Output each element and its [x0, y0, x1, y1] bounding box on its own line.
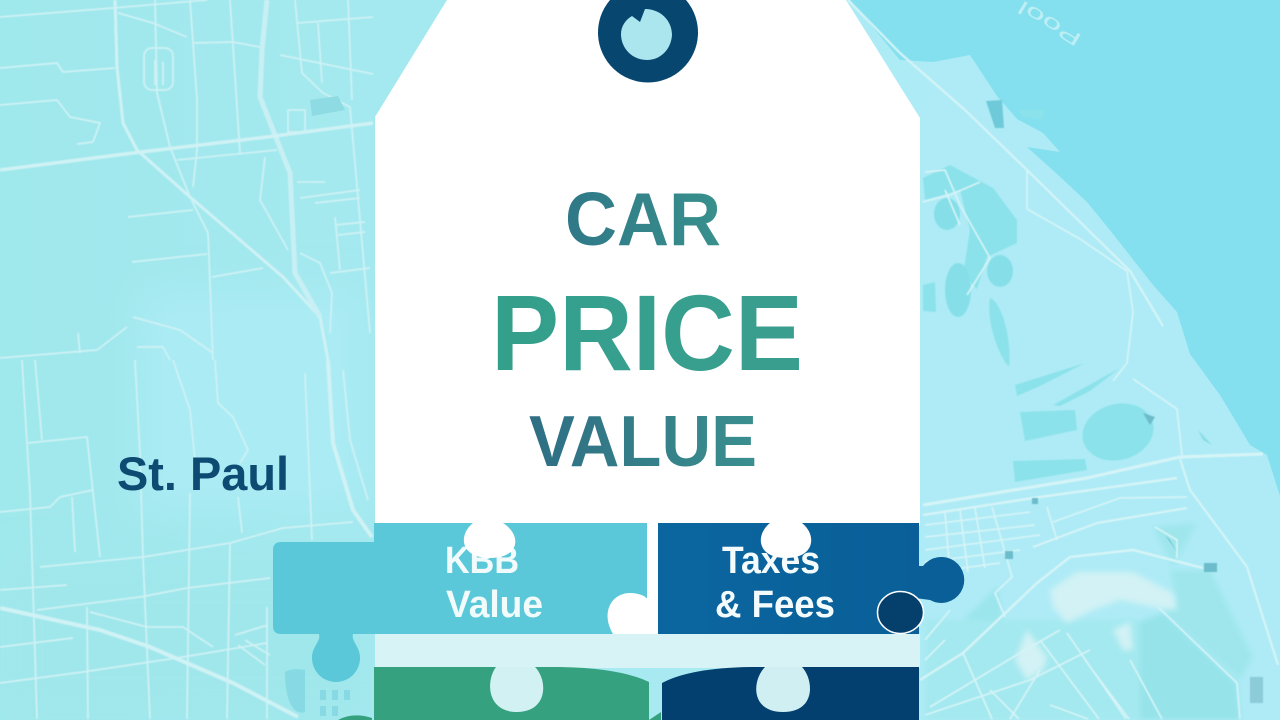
pale areas [1015, 572, 1177, 680]
puzzle piece: navy [662, 667, 919, 720]
text: KBB Value: Value [446, 584, 543, 626]
roads: left side [0, 0, 373, 719]
roads: right side [848, 0, 1278, 719]
text: KBB Value: KBB [445, 540, 519, 582]
notch [756, 667, 810, 712]
lower right shaded land [925, 523, 1253, 720]
text: VALUE: VALUE [529, 402, 757, 482]
puzzle piece: green [338, 667, 661, 720]
small dark map marks [1005, 413, 1263, 703]
notch [761, 523, 811, 558]
tag body [375, 0, 920, 526]
ponds [923, 100, 1212, 482]
text: Taxes & Fees: Taxes [722, 540, 820, 582]
gutter between puzzle rows [375, 634, 920, 668]
green fragment [649, 712, 661, 720]
text: CAR: CAR [565, 177, 721, 261]
side knob [915, 557, 964, 603]
text: St. Paul map label: St. Paul [117, 447, 289, 500]
notch [490, 667, 543, 712]
puzzle piece: KBB Value [273, 523, 658, 682]
puzzle piece: Taxes & Fees [658, 523, 964, 634]
tag hole ring [598, 0, 698, 82]
interlock knob [878, 592, 924, 634]
green knob [338, 715, 372, 720]
text: Taxes & Fees: & Fees [715, 584, 835, 626]
water: river [850, 0, 1280, 496]
dark patch in left map [310, 96, 345, 116]
price tag [375, 0, 920, 526]
text: PRICE: PRICE [491, 272, 803, 393]
text: faint water label: Pool [1015, 0, 1086, 50]
pond and tiles near left puzzle tab [285, 669, 350, 716]
notches [464, 523, 658, 634]
